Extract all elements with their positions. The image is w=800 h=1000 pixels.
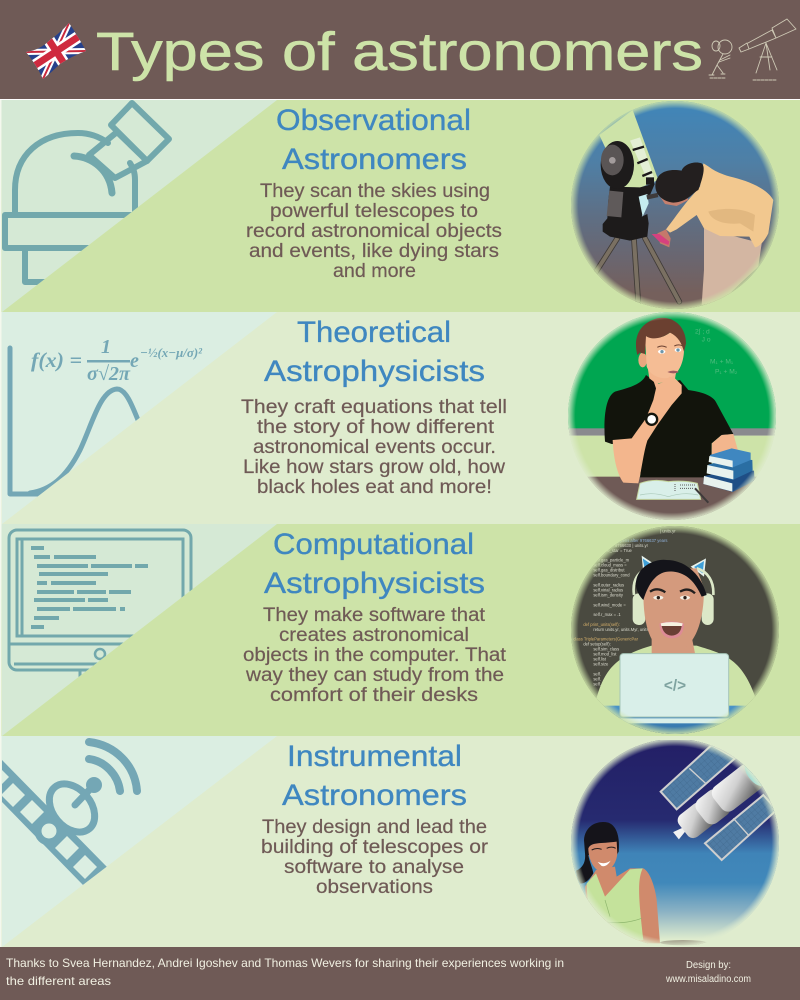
formula [31,340,202,380]
text block: powerful telescopes to [270,201,478,222]
heading: Observational [276,104,471,137]
text block: the story of how different [257,417,495,438]
panel: theoretical astrophysicists [0,310,800,524]
heading: Astrophysicists [264,355,485,388]
illustration: programmer with laptop: self.virial_radius [593,587,623,592]
icon: bell curve and formula [10,336,203,494]
heading: Theoretical [297,316,451,349]
panel: computational astrophysicists [0,524,800,736]
illustration: programmer with laptop: self. [593,671,601,676]
header band [0,0,800,99]
illustration: programmer with laptop: class TripleParameters(GenericPar [573,637,639,642]
icon: observatory [5,103,175,282]
illustration: programmer with laptop: self.r_max = .1 [593,612,621,617]
footer band [0,947,800,1000]
illustration: programmer with laptop: self.outer_radius [593,582,624,587]
formula: 1 [101,336,111,358]
illustration: woman with space telescope [571,740,779,946]
illustration: programmer with laptop: self. [593,681,601,686]
text block: objects in the computer. That [243,645,507,666]
text block: They craft equations that tell [241,397,507,418]
text block: comfort of their desks [270,685,478,706]
triangle background [2,100,277,312]
text block: way they can study from the [245,665,504,686]
text block: and events, like dying stars [249,241,499,262]
text block: creates astronomical [279,625,469,646]
illustration: programmer with laptop: self.cloud_mass = [593,563,627,568]
text block: astronomical events occur. [253,437,496,458]
illustration: programmer with laptop: self.list [593,657,607,662]
text block: They design and lead the [262,817,487,838]
text block: and more [333,261,416,282]
triangle background [2,312,277,524]
formula: σ√2π [87,363,131,385]
design credit: Design by: [686,960,731,971]
illustration: man at desk [568,312,776,520]
illustration: programmer with laptop: return units.yr, units.Myr, units.kms, units.MSun/units.pc [593,627,696,632]
illustration: programmer with laptop: self.gas_distribut [593,568,625,573]
heading: Astrophysicists [264,567,485,600]
illustration: programmer with laptop: self. [593,676,601,681]
panel: observational astronomers [0,100,800,312]
formula: f(x) = [31,348,82,372]
illustration: programmer with laptop: self.mod_list [593,652,617,657]
text block [241,397,507,498]
heading [282,740,467,812]
illustration: man at desk: 2∫ ; d [695,328,710,335]
illustration: man at desk: M₁ + M₁ [710,358,734,365]
text block: software to analyse [284,857,464,878]
text block [243,605,507,706]
text block: record astronomical objects [246,221,502,242]
text block: They make software that [263,605,486,626]
triangle background [2,524,277,736]
text block [246,181,502,282]
illustration: programmer with laptop: self.sim_class [593,647,619,652]
text block [261,817,489,898]
heading [276,104,471,176]
illustration: man at desk: J o [702,337,711,344]
design credit: www.misaladino.com [665,974,751,985]
text block: building of telescopes or [261,837,489,858]
illustration: programmer with laptop: def print_units(self): [583,622,620,627]
triangle background [2,736,277,947]
icon: satellite [2,742,137,885]
panel: instrumental astronomers [0,736,800,950]
illustration: programmer with laptop: def setup(self): [583,642,611,647]
illustration: programmer with laptop: happens after 9766637 years [613,538,667,543]
heading [264,528,485,600]
heading: Astronomers [282,779,467,812]
illustration: programmer with laptop: self.wind_mode = [593,602,626,607]
heading: Computational [273,528,474,561]
title: Types of astronomers [96,22,703,82]
icon: computer screen with code [8,528,192,677]
illustration: programmer with laptop: self.boundary_cond [593,573,630,578]
heading [264,316,485,388]
acknowledgements [6,956,564,988]
text block: They scan the skies using [260,181,490,202]
text block: observations [316,877,433,898]
formula: −½(x−μ/σ)² [140,345,203,360]
illustration: woman at telescope [571,101,779,309]
icon: stick figure and telescope [709,19,796,80]
illustration: programmer with laptop: age = 9766630 | units.yr [603,543,649,548]
illustration: programmer with laptop: self.size [593,662,609,667]
illustration: man at desk: P₁ + M₂ [715,368,738,375]
laptop code symbol: </> [664,678,686,695]
illustration: programmer with laptop: | units.yr [660,528,676,533]
illustration: programmer with laptop: live_star = True [603,548,633,553]
icon: UK flag [26,23,86,79]
illustration: programmer with laptop: self.ism_density [593,592,624,597]
illustration: programmer with laptop [571,526,779,734]
formula: e [130,350,139,372]
acknowledgements: Thanks to Svea Hernandez, Andrei Igoshev and Thomas Wevers for sharing their experiences working in [6,956,564,970]
heading: Astronomers [282,143,467,176]
design credit [665,960,751,985]
text block: black holes eat and more! [257,477,492,498]
text block: Like how stars grow old, how [243,457,505,478]
heading: Instrumental [287,740,462,773]
acknowledgements: the different areas [6,974,111,988]
illustration: programmer with laptop: self.gas_particle_m [593,558,630,563]
